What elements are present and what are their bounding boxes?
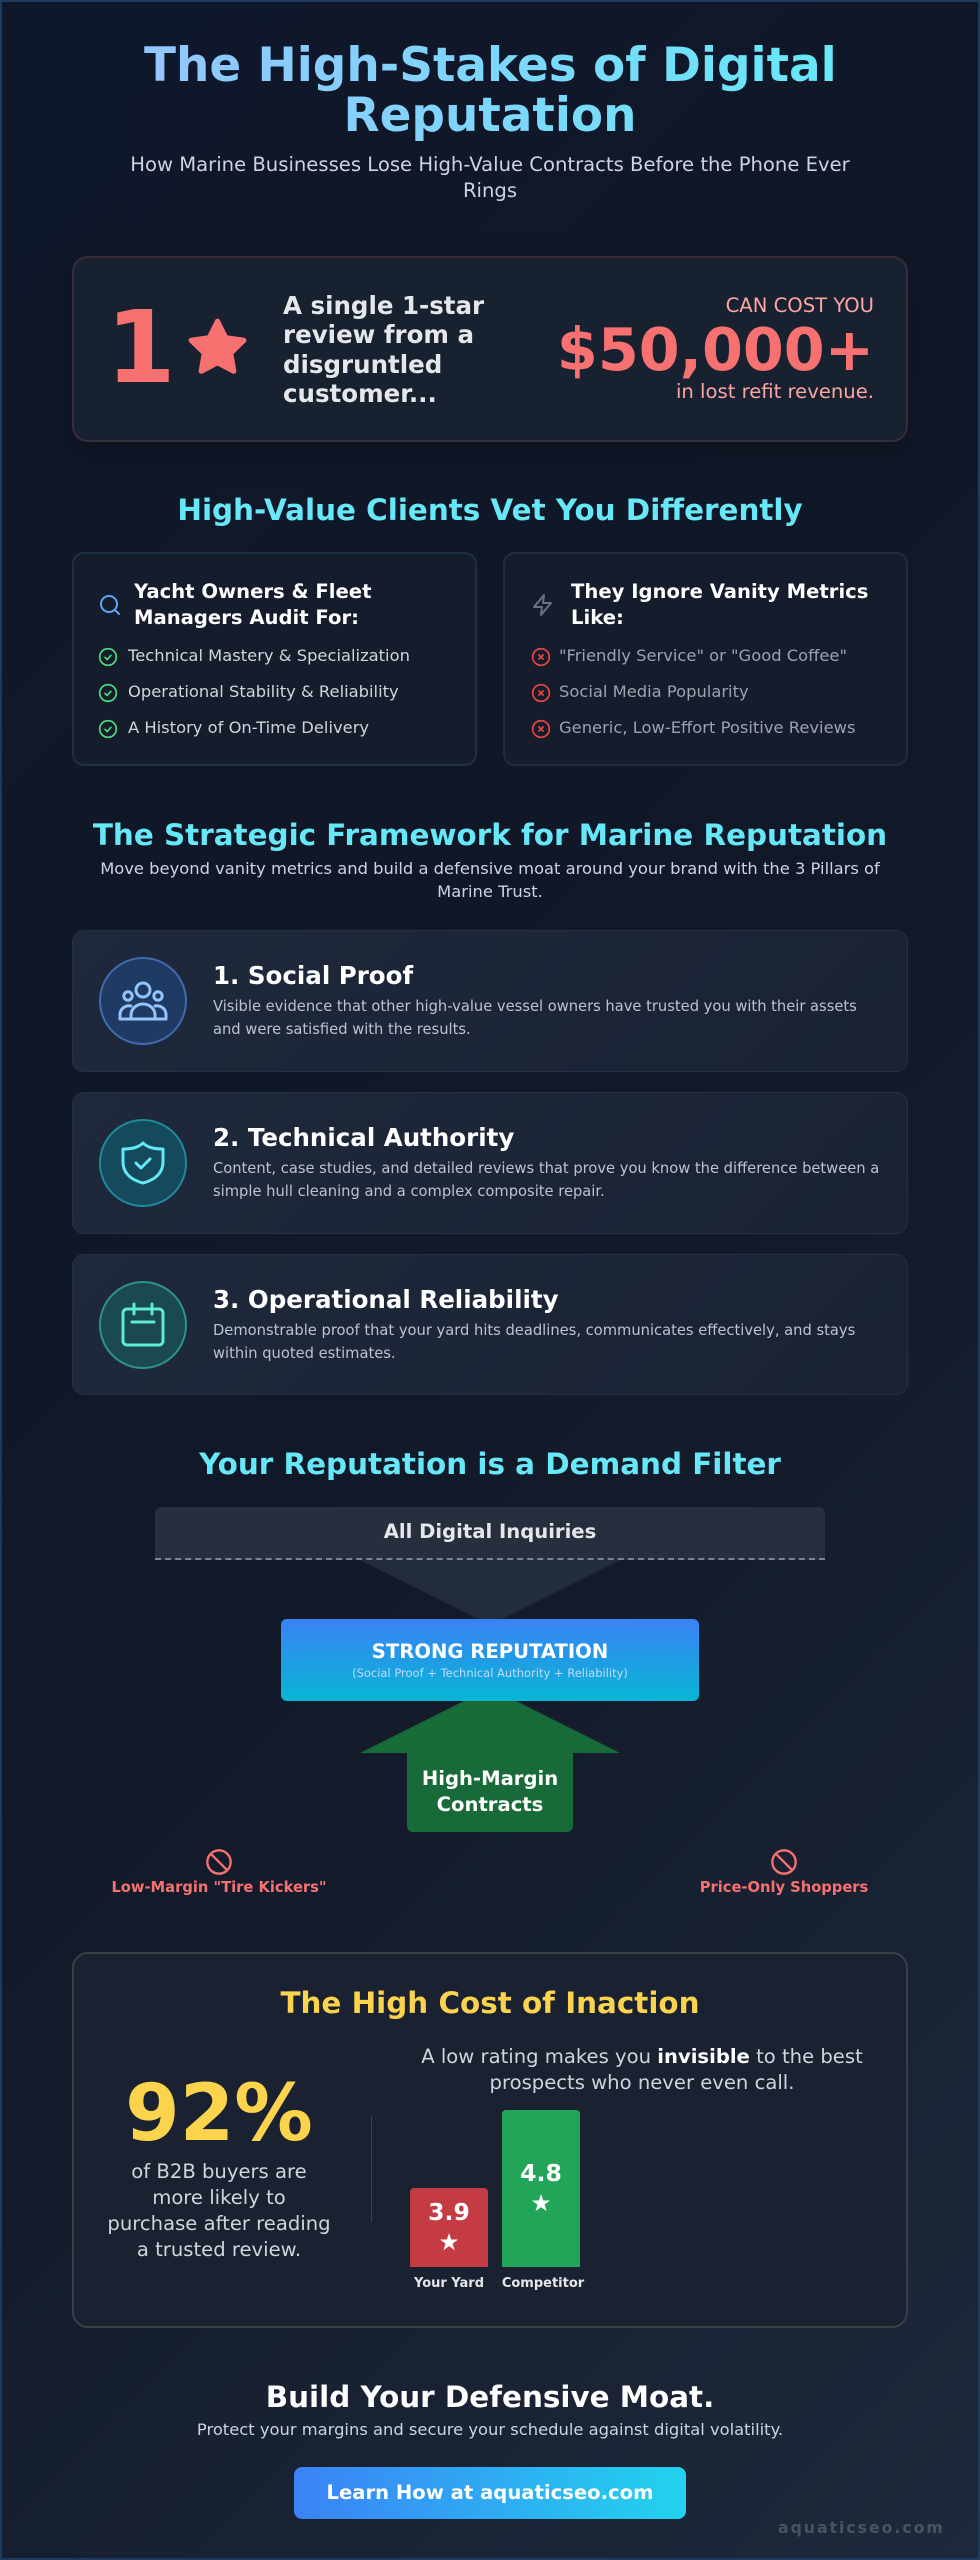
icon: ban [771,1849,797,1875]
rejected: price shoppers [700,1849,868,1896]
filter sub-label: (Social Proof + Technical Authority + Reliability) [352,1666,628,1680]
hero statement: A single 1-star [283,291,484,320]
card heading: They Ignore Vanity Metrics [571,580,868,603]
subtitle: Rings [463,179,517,202]
call to action button: Learn How at aquaticseo.com [326,2481,654,2504]
bar: competitor [502,2110,580,2267]
chart: demand filter funnel [155,1507,825,1832]
chart caption: A low rating makes you invisible to the best [421,2045,863,2068]
pillar title: 2. Technical Authority [213,1123,514,1152]
icon: people [99,957,187,1045]
framework intro: Move beyond vanity metrics and build a defensive moat around your brand with the 3 Pillars of [100,859,880,878]
all inquiries box: All Digital Inquiries [384,1520,596,1543]
pillar description: and were satisfied with the results. [213,1021,471,1038]
pillar description: within quoted estimates. [213,1345,396,1362]
title: The High-Stakes of Digital [144,38,837,93]
hero statement [283,291,484,408]
icon: calendar [99,1281,187,1369]
call to action button [294,2467,686,2519]
framework intro: Marine Trust. [437,882,543,901]
rating: 4.8 [520,2159,562,2187]
rating [520,2159,562,2217]
metric 3: Generic, Low-Effort Positive Reviews [559,718,856,737]
hero statement: customer... [283,379,437,408]
call to action text: Protect your margins and secure your schedule against digital volatility. [197,2420,783,2439]
icon: search [100,595,120,615]
contracts label: High-Margin [422,1767,558,1790]
heading: framework: The Strategic Framework for Marine Reputation [93,818,887,852]
rating: 3.9 [428,2198,470,2226]
stat caption: more likely to [152,2186,286,2209]
title: Reputation [344,88,636,143]
cost text [557,294,874,403]
heading: demand filter: Your Reputation is a Demand Filter [199,1447,781,1481]
reject label: Low-Margin "Tire Kickers" [111,1879,327,1896]
metric 1: "Friendly Service" or "Good Coffee" [559,646,847,665]
panel: operational reliability [72,1254,908,1395]
icon: lightning bolt [533,594,552,616]
card heading [571,580,868,629]
stat caption: purchase after reading [107,2212,331,2235]
panel: technical authority [72,1092,908,1234]
pillar description: Demonstrable proof that your yard hits deadlines, communicates effectively, and stays [213,1322,855,1339]
pillar title: 1. Social Proof [213,961,413,990]
bar label: Competitor [502,2276,584,2291]
title [144,41,836,141]
panel: social proof [72,930,908,1072]
rating [428,2198,470,2256]
panel: vanity metrics [503,552,908,766]
pillar title: 3. Operational Reliability [213,1285,559,1314]
card heading [134,580,372,629]
bar label: Your Yard [414,2276,484,2291]
pillar description [213,1160,879,1200]
pillar description: Content, case studies, and detailed reviews that prove you know the difference between a [213,1160,879,1177]
stat caption: of B2B buyers are [131,2160,307,2183]
pillar description: simple hull cleaning and a complex composite repair. [213,1183,605,1200]
rejected: tire kickers [111,1849,327,1896]
card heading: Managers Audit For: [134,606,359,629]
criterion 3: A History of On-Time Delivery [128,718,369,737]
hero statement: review from a [283,320,474,349]
card heading: Like: [571,606,624,629]
funnel cone [360,1560,620,1619]
metric 2: Social Media Popularity [559,682,749,701]
watermark: aquaticseo.com [778,2518,945,2537]
divider [371,2116,372,2222]
bar: your yard [410,2188,488,2267]
pillar description [213,1322,855,1362]
stat caption [107,2160,331,2261]
framework intro [100,859,880,901]
panel: one star hero [72,256,908,442]
subtitle: How Marine Businesses Lose High-Value Contracts Before the Phone Ever [130,153,850,176]
criterion 1: Technical Mastery & Specialization [128,646,410,665]
panel heading: The High Cost of Inaction [280,1986,700,2020]
hero statement: disgruntled [283,350,442,379]
contracts label [422,1767,558,1816]
panel: cost of inaction [72,1952,908,2328]
pillar description [213,998,857,1038]
filter label: STRONG REPUTATION [372,1640,608,1663]
rating: ★ [530,2189,552,2217]
big stat: 92% [125,2068,313,2159]
subtitle [130,153,850,202]
card heading: Yacht Owners & Fleet [134,580,371,603]
chart caption: prospects who never even call. [490,2071,794,2094]
cost figure: $50,000+ [557,315,874,384]
call to action heading: Build Your Defensive Moat. [266,2380,714,2414]
cost intro: CAN COST YOU [726,294,874,317]
icon: shield [99,1119,187,1207]
icon: star [188,318,246,374]
strong reputation filter [281,1619,699,1701]
chart caption [421,2045,863,2094]
reject label: Price-Only Shoppers [700,1879,868,1896]
contracts arrow [360,1701,620,1832]
icon: ban [206,1849,232,1875]
heading: vetting: High-Value Clients Vet You Differently [177,493,803,527]
big number 1: 1 [106,289,176,406]
contracts label: Contracts [437,1793,543,1816]
stat caption: a trusted review. [137,2238,301,2261]
all inquiries box [155,1507,825,1560]
criterion 2: Operational Stability & Reliability [128,682,399,701]
pillar description: Visible evidence that other high-value vessel owners have trusted you with their assets [213,998,857,1015]
panel: audit for [72,552,477,766]
rating: ★ [438,2228,460,2256]
cost outro: in lost refit revenue. [676,380,874,403]
